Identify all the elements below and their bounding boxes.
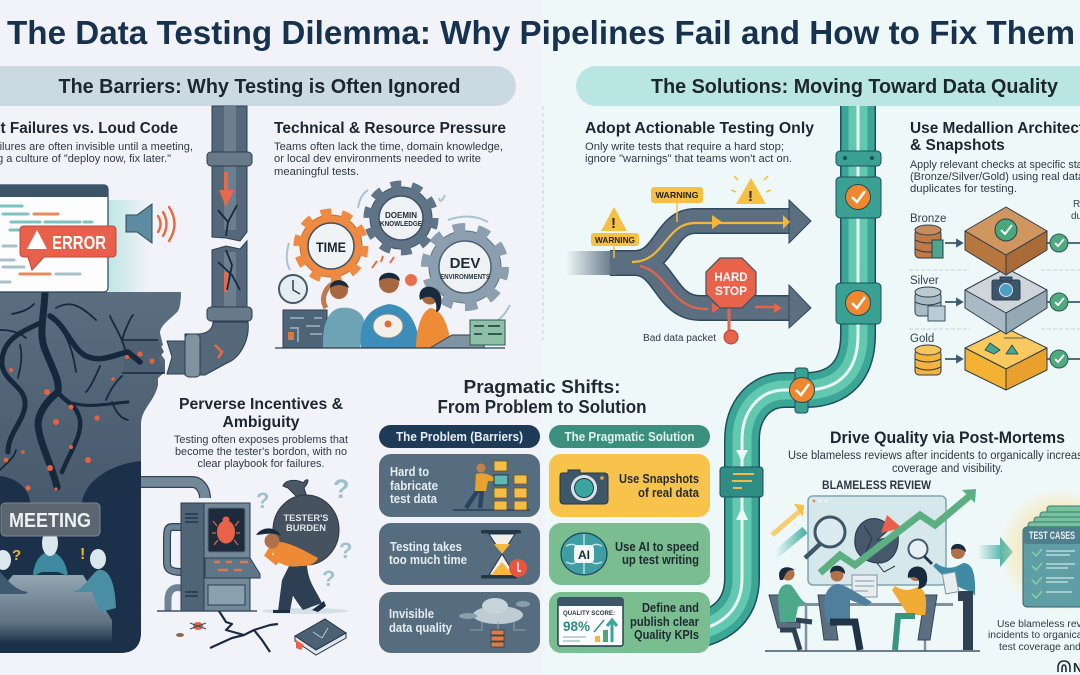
heading: technical pressure: Technical & Resource Pressure	[274, 120, 506, 137]
medallion labels	[910, 199, 1080, 345]
pipe monitor coupling	[720, 467, 763, 497]
hard stop sign: STOP	[715, 284, 747, 298]
text: technical pressure: Teams often lack the time, domain knowledge,	[274, 141, 503, 153]
heading: medallion	[910, 120, 1080, 154]
icon: clock	[279, 275, 307, 303]
card: quality KPIs: Define and	[642, 601, 699, 615]
pipe checkpoint two	[836, 283, 881, 324]
text: medallion: duplicates for testing.	[910, 183, 1017, 195]
warning sign one	[591, 207, 639, 258]
banner: solutions	[576, 66, 1080, 106]
question marks: ?	[339, 538, 352, 563]
review team at table	[765, 544, 980, 651]
icon: camera	[560, 470, 608, 504]
stressed team	[323, 256, 450, 348]
background: solutions side	[543, 0, 1080, 675]
cube: silver	[965, 268, 1047, 334]
KPI dashboard card: 98%	[563, 619, 590, 634]
text: perverse incentives: Testing often exposes problems that	[174, 434, 348, 446]
logo: NotebookLM	[1058, 660, 1080, 675]
pipe arrows	[736, 450, 748, 520]
broken pipe stub in ground	[122, 340, 165, 373]
text: medallion	[910, 159, 1080, 195]
card: invisible data quality: data quality	[389, 621, 452, 635]
ground crack	[210, 611, 278, 652]
title: The Data Testing Dilemma: Why Pipelines Fail and How to Fix Them	[7, 14, 1075, 51]
gear: domain knowledge: KNOWLEDGE	[380, 219, 422, 228]
review screen	[805, 496, 946, 585]
medallion labels: Gold	[910, 333, 934, 345]
card: use AI: up test writing	[622, 553, 699, 567]
hard stop sign	[706, 258, 756, 344]
heading: post-mortems: Drive Quality via Post-Mortems	[830, 428, 1065, 447]
circuit panel	[283, 310, 327, 348]
medallion labels: Bronze	[910, 213, 946, 225]
cracked pie chart	[855, 515, 902, 572]
panel: collapsing ground and meeting	[0, 292, 181, 653]
card: hard to fabricate: Hard to	[390, 465, 429, 479]
heading: perverse incentives: Perverse Incentives &	[179, 396, 343, 413]
card: invisible data quality: Invisible	[389, 607, 434, 621]
card: use snapshots: of real data	[638, 486, 700, 500]
person carrying tester's burden: TESTER'S	[284, 513, 328, 523]
gear: time: TIME	[316, 239, 346, 255]
medallion labels: Silver	[910, 275, 939, 287]
branching data flow arrows	[566, 221, 795, 309]
teal quality pipeline	[700, 106, 858, 630]
heading: medallion: & Snapshots	[910, 137, 1005, 154]
banner: barriers: The Barriers: Why Testing is Often Ignored	[58, 76, 460, 98]
icon: AI brain: AI	[578, 548, 590, 562]
small bug	[176, 622, 206, 637]
card: testing takes time: Testing takes	[390, 540, 462, 554]
warning label two: WARNING	[656, 190, 699, 200]
text: medallion: (Bronze/Silver/Gold) using real data	[910, 171, 1080, 183]
warning sign two	[731, 176, 771, 205]
text: technical pressure: meaningful tests.	[274, 166, 359, 178]
card: hard to fabricate: fabricate	[390, 479, 438, 493]
pill: the problem: The Problem (Barriers)	[396, 429, 523, 444]
browser window with error	[0, 185, 150, 292]
heading: pragmatic shifts	[438, 376, 646, 417]
meeting participants: !	[80, 546, 85, 563]
meeting participants: ?	[12, 547, 21, 564]
orange sparks	[4, 351, 155, 491]
text: post-mortems	[788, 450, 1080, 475]
cube: bronze	[965, 207, 1047, 275]
green trend arrow	[820, 489, 976, 573]
card: hard to fabricate: test data	[390, 492, 438, 506]
card: use AI: Use AI to speed	[615, 540, 699, 554]
layer arrows	[945, 240, 1080, 362]
banner: barriers	[0, 66, 516, 106]
pill: the problem	[379, 425, 540, 448]
heading: pragmatic shifts: From Problem to Solution	[438, 396, 646, 417]
card: testing takes time	[379, 523, 540, 585]
cube: gold	[965, 328, 1047, 390]
card: quality KPIs	[549, 592, 710, 653]
broken vertical pipe	[167, 106, 252, 377]
gear: time	[298, 213, 364, 279]
meeting label	[1, 503, 100, 536]
error bubble	[20, 226, 116, 270]
gear: domain knowledge	[368, 185, 434, 251]
text: actionable testing: Only write tests that require a hard stop;	[585, 141, 784, 153]
text: perverse incentives	[174, 434, 348, 470]
gear: dev environments: ENVIRONMENTS	[440, 274, 490, 281]
table	[0, 575, 112, 643]
card: use snapshots: Use Snapshots	[619, 472, 699, 486]
card: quality KPIs: publish clear	[630, 615, 699, 629]
test cases stack	[998, 488, 1080, 612]
warning sign one: !	[611, 215, 616, 232]
person carrying tester's burden	[256, 480, 348, 614]
label: blameless review: BLAMELESS REVIEW	[822, 478, 932, 492]
label: bad data packet: Bad data packet	[643, 333, 716, 344]
roots and cracks	[0, 292, 140, 487]
text: silent failures	[0, 141, 193, 165]
pill: the solution: The Pragmatic Solution	[564, 429, 695, 444]
person carrying tester's burden: BURDEN	[286, 523, 326, 533]
icon: hourglass	[481, 530, 527, 578]
heading: perverse incentives: Ambiguity	[222, 414, 300, 431]
icon: gold database	[915, 345, 941, 375]
question marks: ?	[256, 488, 269, 513]
meeting label: MEETING	[9, 510, 91, 532]
KPI dashboard card: QUALITY SCORE:	[563, 611, 615, 617]
machine with bug	[141, 482, 260, 611]
review document	[852, 575, 877, 597]
icon: silver database	[915, 287, 945, 321]
warning sign two: !	[748, 188, 753, 205]
icon: loud speaker	[126, 204, 174, 243]
laptop and circuit board	[275, 320, 505, 348]
text: technical pressure	[274, 141, 503, 178]
pipe coupling	[836, 151, 881, 166]
card: testing takes time: too much time	[389, 553, 467, 567]
heading: pragmatic shifts: Pragmatic Shifts:	[464, 376, 620, 397]
error bubble: ERROR	[52, 233, 106, 253]
card: hard to fabricate	[379, 454, 540, 517]
card: use snapshots	[549, 454, 710, 517]
text: perverse incentives: clear playbook for failures.	[198, 458, 324, 470]
hard stop sign: HARD	[714, 270, 748, 284]
icon: person pushing folders	[453, 461, 530, 510]
KPI dashboard card	[558, 598, 623, 646]
gear: domain knowledge: DOEMIN	[385, 211, 417, 220]
text: test cases note	[988, 619, 1080, 653]
banner: solutions: The Solutions: Moving Toward Data Quality	[651, 76, 1059, 98]
icon: AI brain	[561, 533, 607, 575]
text: technical pressure: or local dev environments needed to write	[274, 153, 481, 165]
question marks	[256, 474, 352, 591]
pipe checkpoint three	[790, 368, 814, 413]
arrow to test cases	[978, 537, 1013, 567]
text: actionable testing	[585, 141, 792, 165]
rising arrows	[772, 511, 805, 555]
text: perverse incentives: become the tester's bordon, with no	[175, 446, 347, 458]
pipe checkpoint one	[836, 177, 881, 218]
rotation arrows	[287, 190, 510, 320]
question marks: ?	[322, 566, 335, 591]
card: quality KPIs: Quality KPIs	[634, 628, 699, 642]
small magnifier	[908, 540, 932, 564]
warning sign one: WARNING	[595, 235, 635, 245]
icon: playbook	[295, 619, 346, 655]
text: post-mortems: coverage and visibility.	[892, 463, 1003, 475]
question marks: ?	[333, 474, 350, 504]
arrow heads	[712, 200, 811, 328]
background: barriers side	[0, 0, 543, 675]
heading: actionable testing: Adopt Actionable Testing Only	[585, 120, 814, 137]
magnifier large	[805, 517, 845, 558]
warning label two	[651, 187, 703, 222]
text: actionable testing: ignore "warnings" that teams won't act on.	[585, 153, 792, 165]
card: invisible data quality	[379, 592, 540, 653]
gear: dev environments: DEV	[450, 255, 480, 272]
meeting participants	[0, 530, 116, 612]
icon: bronze database	[915, 225, 943, 258]
pill: the solution	[549, 425, 710, 448]
heading: perverse incentives	[179, 396, 343, 431]
layer check marks	[1050, 234, 1068, 368]
gear: dev environments	[426, 228, 504, 306]
card: use AI	[549, 523, 710, 585]
icon: cloud and database	[459, 598, 530, 647]
